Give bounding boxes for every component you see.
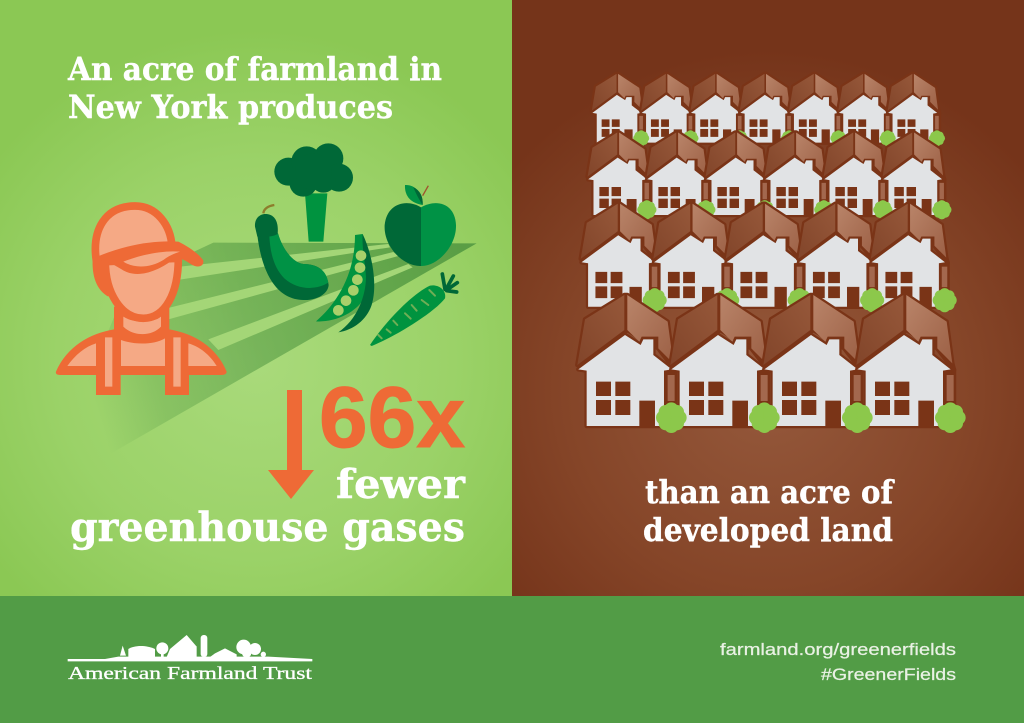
text: fewer greenhouse gases: greenhouse gases <box>70 504 465 551</box>
field rows <box>85 243 477 468</box>
heading: farmland title <box>67 50 442 126</box>
icon: pea pod <box>316 234 374 332</box>
icon: broccoli <box>274 143 353 242</box>
panel: farmland background <box>0 0 512 596</box>
text: fewer greenhouse gases: fewer <box>336 461 466 508</box>
text: website and hashtag: farmland.org/greenerfields <box>720 640 956 659</box>
illustration: rows of houses <box>577 74 966 433</box>
callout: 66x arrow <box>268 390 314 499</box>
text: than an acre of developed land <box>643 473 895 549</box>
icon: farmer <box>56 206 227 395</box>
panel: developed land background <box>512 0 1024 596</box>
houses: front row <box>577 295 966 433</box>
heading: farmland title: An acre of farmland in <box>67 50 442 88</box>
icon: apple <box>385 185 456 266</box>
text: than an acre of developed land: than an acre of <box>645 473 895 511</box>
text: website and hashtag <box>720 640 956 684</box>
houses: third row <box>581 204 957 312</box>
logo: wordmark: American Farmland Trust <box>68 663 312 683</box>
illustration: farmer, field and vegetables <box>56 143 477 468</box>
logo: farm silhouette <box>68 635 312 661</box>
logo: American Farmland Trust <box>68 635 312 683</box>
houses: second row <box>588 132 952 219</box>
stat: 66x: 66x <box>319 370 465 466</box>
text: website and hashtag: #GreenerFields <box>821 665 956 684</box>
panel: footer band <box>0 596 1024 723</box>
icon: carrot <box>370 274 457 346</box>
text: than an acre of developed land: developed land <box>643 511 893 549</box>
text: fewer greenhouse gases <box>70 461 466 551</box>
houses: back row <box>592 74 945 146</box>
icon: zucchini <box>255 205 329 300</box>
heading: farmland title: New York produces <box>68 88 393 126</box>
